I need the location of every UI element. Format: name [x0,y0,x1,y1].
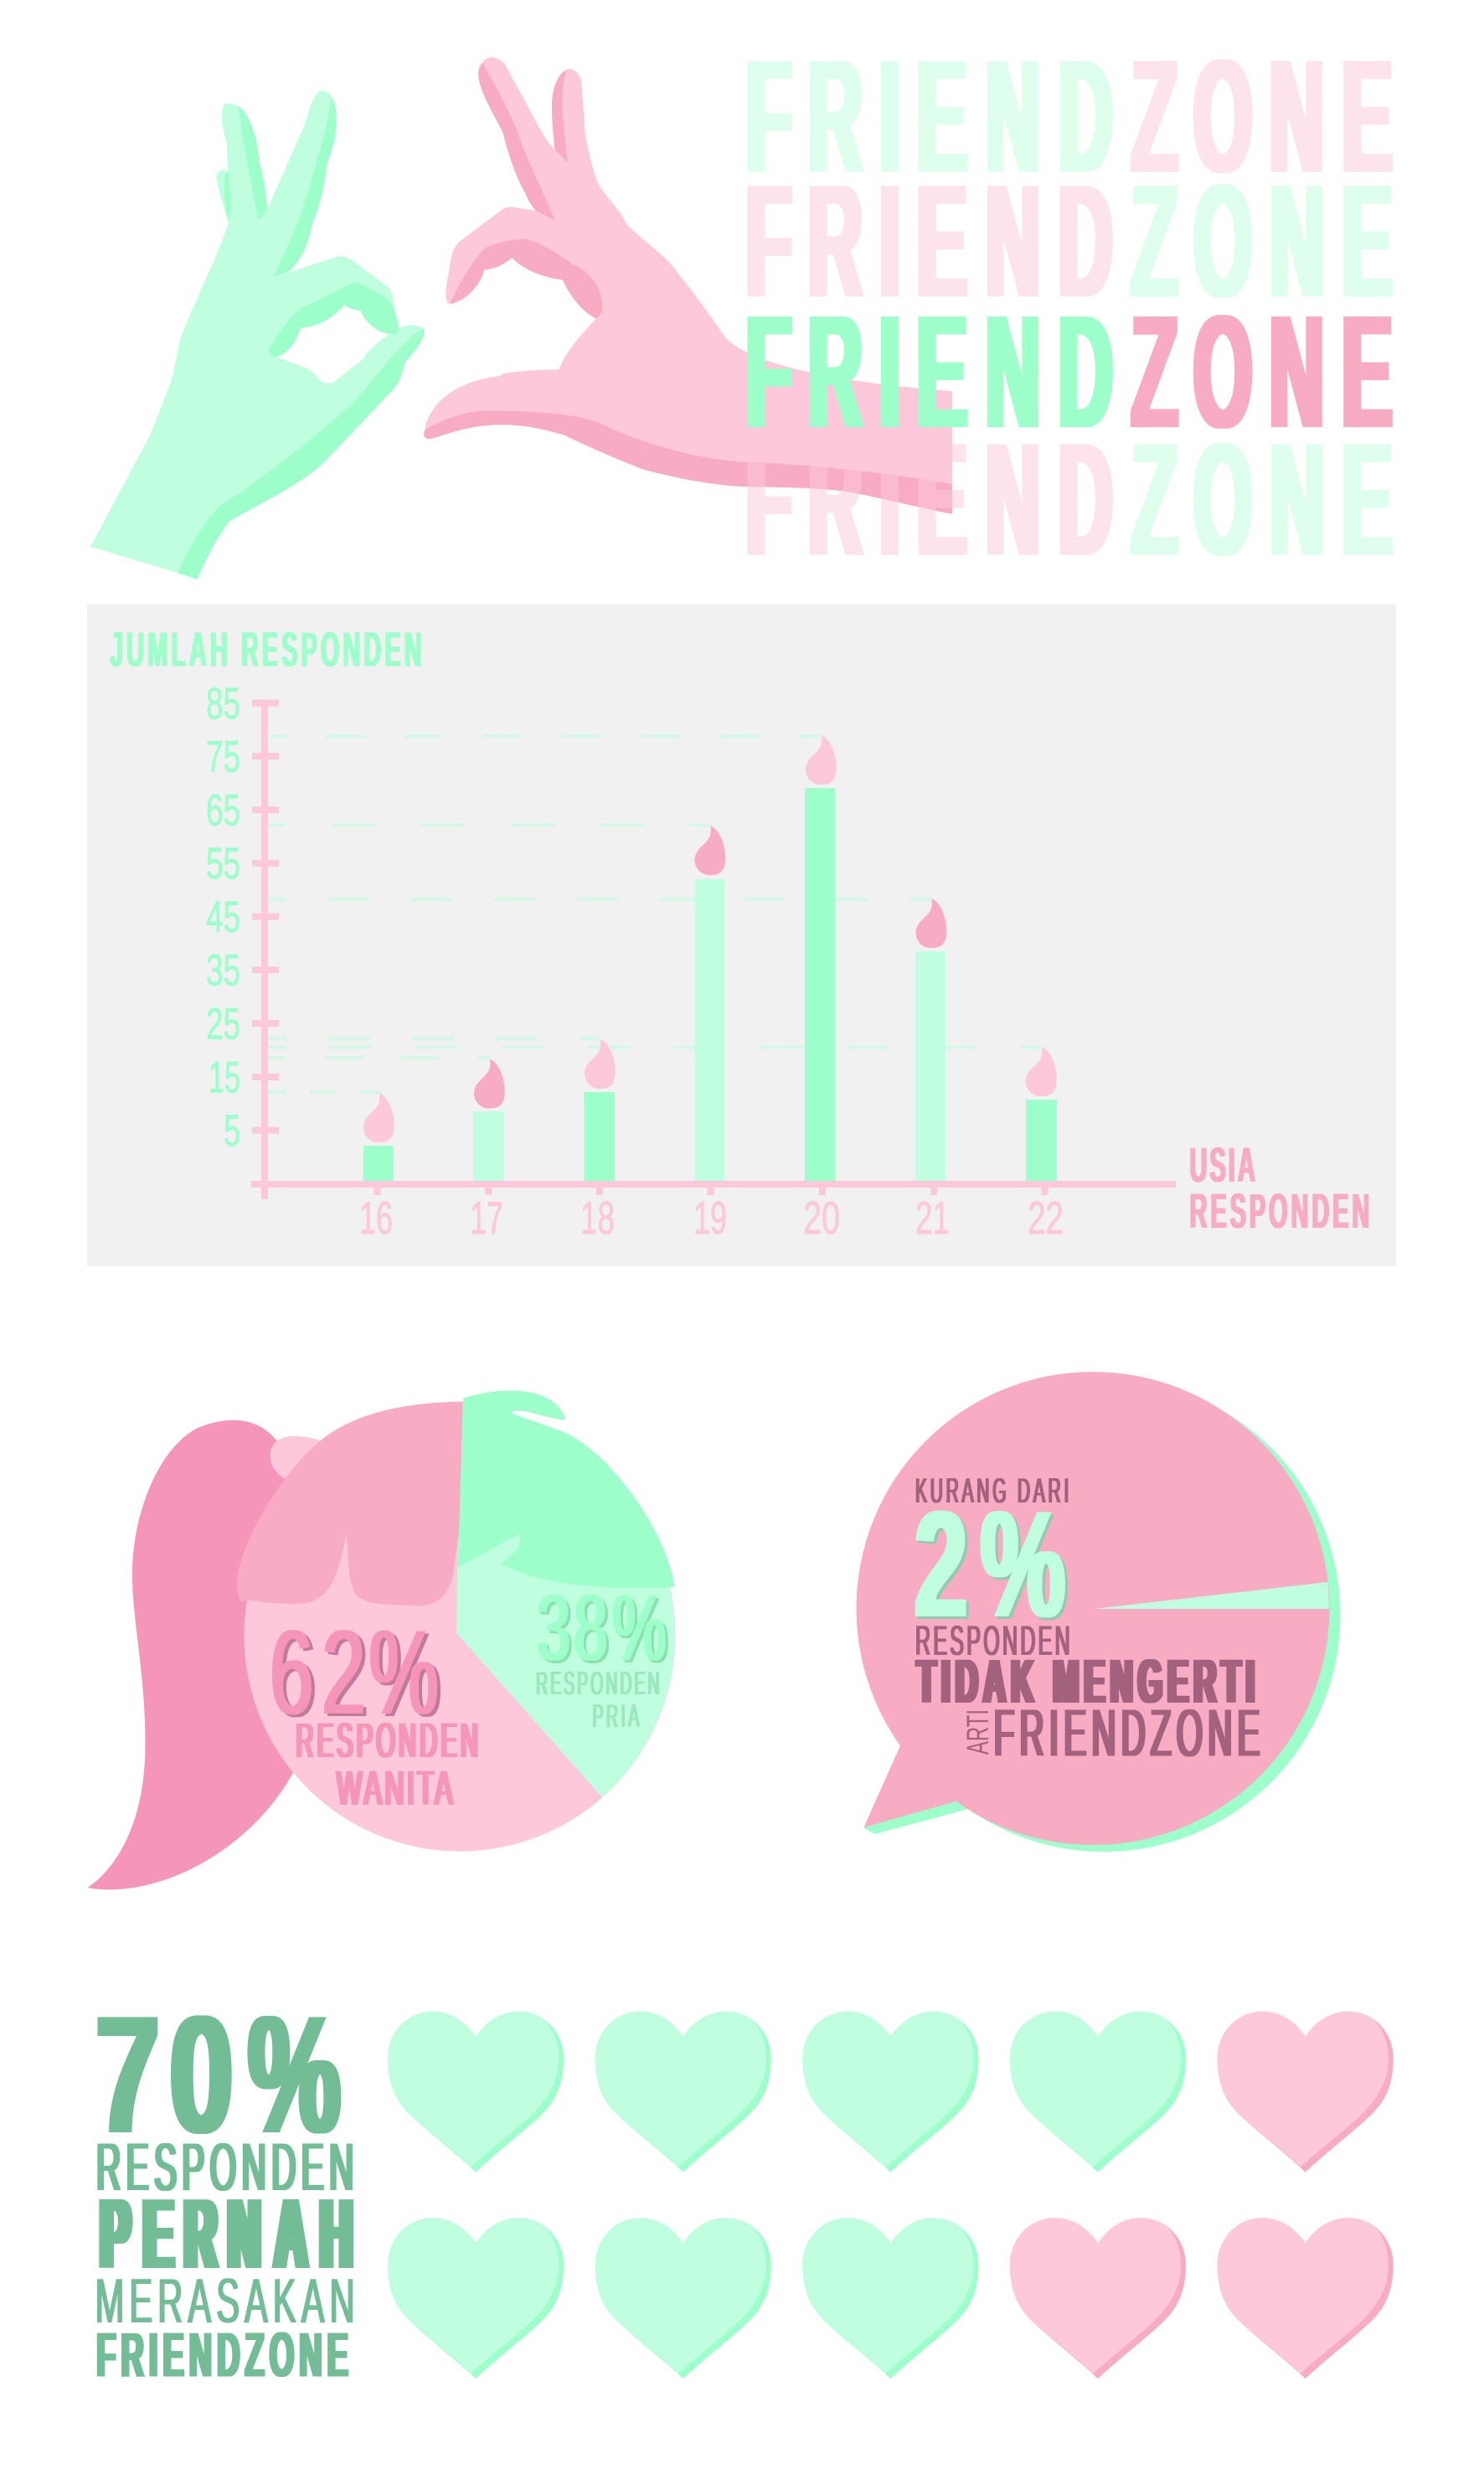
text: arti rotated: ARTI [961,1709,995,1755]
y axis labels: 45 [206,893,240,942]
stat: 70% [96,1982,341,2168]
x axis labels [359,1192,1064,1244]
pie slice: 62% women [245,1420,675,1851]
heart row 1, col 3: green [802,2012,978,2172]
heart row 1, col 5: pink [1218,2012,1394,2172]
bar: age 18 [585,1039,616,1184]
ponytail and hair tie [88,1420,400,1889]
title row 1: FRIENDZONE: ZONE [1131,26,1392,206]
stat block: 70% responden pernah merasakan friendzone [95,1982,360,2390]
pie wedge: 2% [1094,1582,1329,1609]
bar: age 19 [695,826,725,1184]
y axis labels: 25 [206,1000,240,1049]
stat: 62%: 62% [270,1606,438,1740]
y axis labels: 15 [209,1054,240,1102]
y axis labels: 65 [206,786,240,836]
stat: 2%: 2% [915,1480,1065,1649]
label: responden wanita: WANITA [337,1761,456,1815]
pie slice: 38% men [456,1420,675,1797]
text: pernah: PERNAH [100,2178,353,2290]
x axis labels: 20 [803,1192,840,1244]
title row 4: FRIENDZONE [745,409,1392,589]
bar: age 17 [473,1059,505,1184]
title row 3: FRIENDZONE highlighted: ZONE [1131,281,1392,461]
stat: 38%: 38% [537,1575,666,1680]
title row 2: FRIENDZONE: FRIEND [745,151,1113,331]
stat: 70%: % [248,1982,341,2168]
y axis labels: 85 [206,679,240,729]
y axis labels: 35 [206,946,240,995]
heart row 1, col 1: green [388,2012,564,2172]
x axis labels: 22 [1028,1192,1064,1244]
title row 2: FRIENDZONE: ZONE [1131,151,1392,331]
stat: 70%: 70 [96,1982,233,2168]
bar: age 16 [363,1093,394,1184]
hair: pink fringe and green hair [237,1390,674,1606]
y axis with ticks [252,699,279,1199]
heart row 2, col 3: green [802,2218,978,2379]
heart row 2, col 1: green [388,2218,564,2379]
text: responden: RESPONDEN [96,2129,359,2205]
y axis labels: 75 [206,732,240,782]
text: merasakan: MERASAKAN [95,2265,360,2336]
label: responden pria: RESPONDEN [536,1665,662,1702]
panel: speech bubble 2% [856,1372,1340,1852]
text: friendzone: FRIENDZONE [96,2319,353,2390]
label: responden pria: PRIA [593,1698,642,1734]
heart row 1, col 2: green [595,2012,771,2172]
heart row 2, col 2: green [595,2218,771,2379]
bar: age 20 [805,735,837,1184]
title row 3: FRIENDZONE highlighted [745,281,1392,461]
y axis labels: 5 [224,1106,240,1156]
title row 1: FRIENDZONE [745,26,1392,206]
x axis with ticks [251,1181,1176,1195]
label: responden wanita [296,1713,482,1815]
text: tidak mengerti: TIDAK MENGERTI [917,1647,1260,1716]
heart row 1, col 4: green [1010,2012,1186,2172]
title row 2: FRIENDZONE [745,151,1392,331]
x axis title [1189,1137,1373,1239]
x axis labels: 16 [359,1192,393,1244]
title row 4: FRIENDZONE: FRIEND [745,409,1113,589]
title row 1: FRIENDZONE: FRIEND [745,26,1113,206]
illustration: pink hand [424,57,952,514]
bubble shadow [863,1379,1340,1852]
bubble body [856,1372,1330,1845]
heart row 2, col 5: pink [1218,2218,1394,2379]
text: kurang dari: KURANG DARI [915,1472,1072,1511]
title row 3: FRIENDZONE highlighted: FRIEND [745,281,1113,461]
panel: age bar chart [87,605,1396,1266]
label: responden pria [536,1665,662,1734]
x axis labels: 21 [915,1192,950,1244]
bar: age 21 [915,899,946,1184]
panel: gender pie as girl head [88,1390,675,1889]
x axis labels: 18 [580,1192,615,1244]
heart row 2, col 4: pink [1010,2218,1186,2379]
bar: age 22 [1026,1047,1057,1184]
label: responden wanita: RESPONDEN [296,1713,482,1768]
dashed guide lines [268,736,1042,1092]
y axis labels: 55 [206,839,240,889]
x axis labels: 17 [470,1192,503,1244]
x axis title: USIA [1189,1137,1258,1193]
chart background [87,605,1396,1266]
title row 4: FRIENDZONE: ZONE [1131,409,1392,589]
illustration: green OK hand [90,90,425,580]
x axis title: RESPONDEN [1189,1183,1373,1239]
y axis title: JUMLAH RESPONDEN [110,621,425,677]
x axis labels: 19 [693,1192,727,1244]
text: responden: RESPONDEN [915,1618,1073,1664]
text: friendzone: FRIENDZONE [994,1697,1265,1770]
y axis labels [206,679,240,1156]
